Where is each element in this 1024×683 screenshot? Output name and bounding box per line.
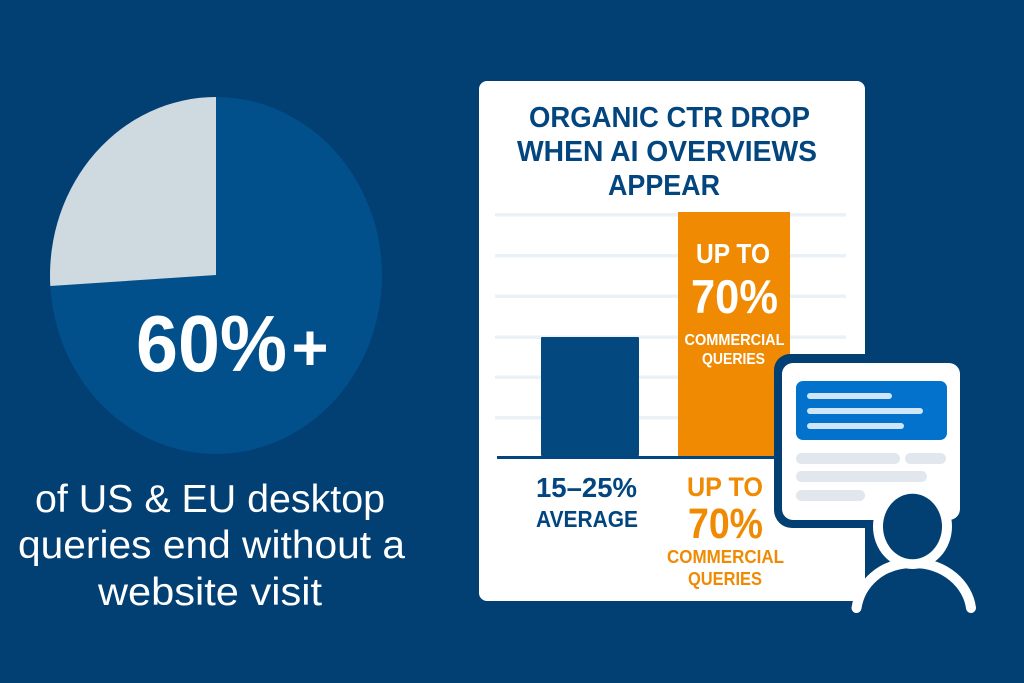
pie slice: remaining share xyxy=(50,97,216,286)
chart baseline xyxy=(497,456,777,459)
pie description xyxy=(18,478,405,614)
pie value: 60%+: 60% xyxy=(136,299,287,388)
label: average: AVERAGE xyxy=(536,506,638,532)
bar text: 70% xyxy=(691,270,778,323)
panel: organic CTR chart xyxy=(479,81,865,601)
bar text: UP TO xyxy=(696,238,770,269)
AI overview box xyxy=(796,381,947,440)
result lines xyxy=(796,453,946,501)
chart title: WHEN AI OVERVIEWS xyxy=(517,136,817,168)
pie chart xyxy=(50,97,382,454)
bar text: QUERIES xyxy=(702,351,765,368)
bar: average xyxy=(541,337,639,456)
bar: commercial queries xyxy=(678,212,790,456)
pie value: 60%+: + xyxy=(292,310,328,384)
pie description: queries end without a xyxy=(18,524,405,567)
label: average xyxy=(536,472,638,532)
label: average: 15–25% xyxy=(536,472,637,503)
icon: user xyxy=(856,484,971,608)
label: commercial queries: UP TO xyxy=(687,472,763,502)
bar text xyxy=(684,238,784,368)
label: commercial queries: QUERIES xyxy=(688,568,762,589)
chart title xyxy=(517,102,817,202)
label: commercial queries: 70% xyxy=(688,500,763,548)
pie description: website visit xyxy=(97,571,322,614)
bar text: COMMERCIAL xyxy=(684,332,784,349)
label: commercial queries: COMMERCIAL xyxy=(667,546,784,567)
icon: search results window xyxy=(774,354,960,528)
chart title: ORGANIC CTR DROP xyxy=(529,102,810,134)
pie description: of US & EU desktop xyxy=(35,478,385,521)
label: commercial queries xyxy=(667,472,784,589)
chart title: APPEAR xyxy=(608,170,720,202)
